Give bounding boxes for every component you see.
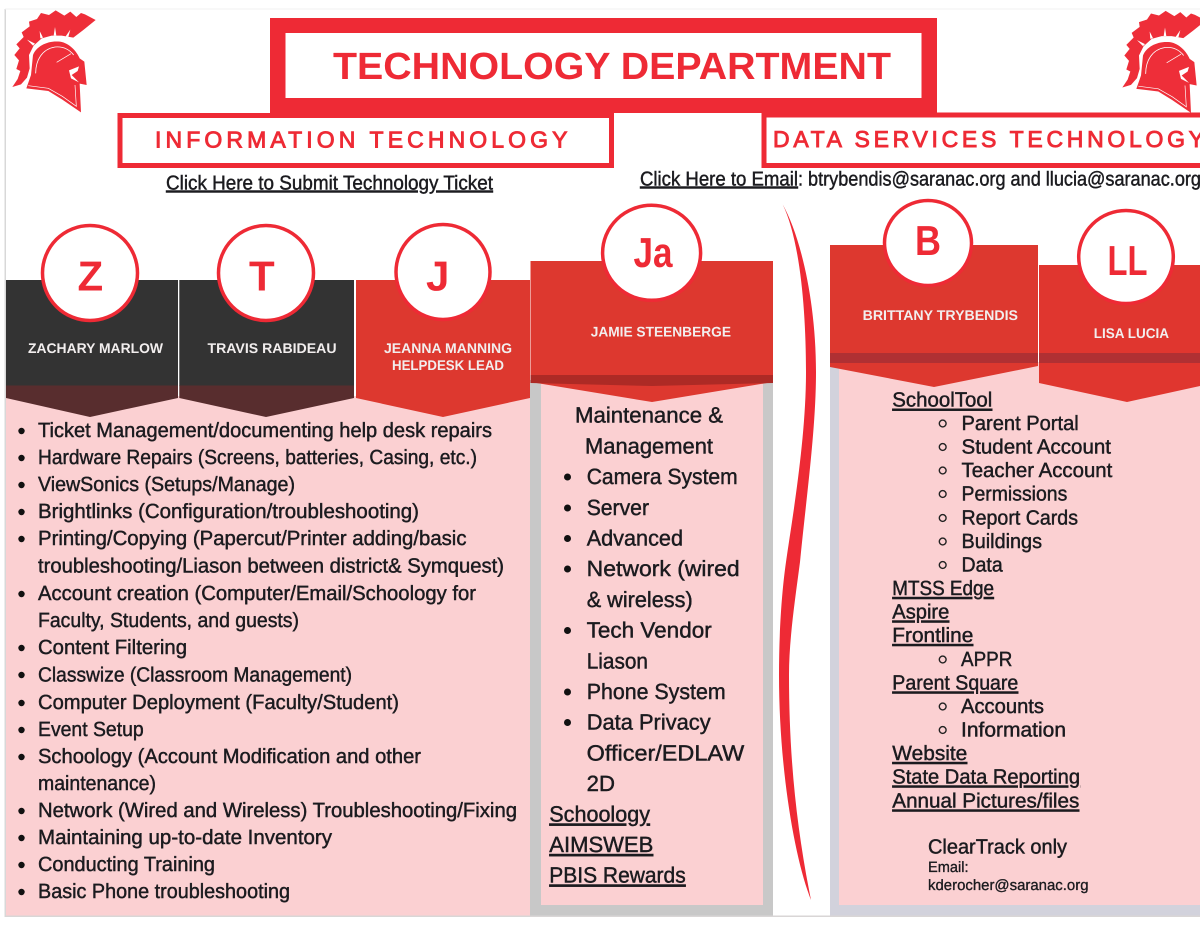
ribbon: Jeanna Manning: JEANNA MANNING — [384, 340, 512, 356]
note: ClearTrack contact: kderocher@saranac.org — [928, 877, 1088, 894]
list: data services duties — [892, 389, 1113, 812]
note: ClearTrack contact: ClearTrack only — [928, 836, 1068, 858]
ribbon: Zachary Marlow: ZACHARY MARLOW — [28, 340, 164, 356]
list: information technology duties: Network (Wired and Wireless) Troubleshooting/Fixing — [38, 799, 517, 822]
list: data services duties: MTSS Edge — [892, 577, 994, 600]
list: information technology duties: Event Setup — [38, 718, 144, 741]
ribbon: Jamie Steenberge: JAMIE STEENBERGE — [591, 324, 731, 340]
list: Jamie duties: Maintenance & — [575, 402, 723, 428]
divider swoosh — [779, 204, 816, 900]
list: information technology duties: Classwize (Classroom Management) — [38, 664, 352, 686]
list: information technology duties: Account creation (Computer/Email/Schoology for — [38, 582, 476, 605]
ribbon: Jamie Steenberge — [530, 205, 773, 402]
list: data services duties: Parent Portal — [962, 412, 1079, 435]
link: submit technology ticket: Click Here to Submit Technology Ticket — [166, 172, 493, 194]
list: Jamie duties: Liason — [587, 648, 648, 674]
ribbon: Travis Rabideau: TRAVIS RABIDEAU — [208, 340, 336, 356]
list: data services duties: Accounts — [961, 695, 1044, 718]
list: data services duties: Report Cards — [962, 506, 1078, 530]
list: Jamie duties: Data Privacy — [587, 710, 711, 734]
list: data services duties: Website — [892, 742, 967, 765]
link: email contacts: Click Here to Email — [640, 168, 798, 190]
list: data services duties: Aspire — [892, 600, 949, 624]
list: Jamie duties: AIMSWEB — [549, 832, 653, 857]
list: Jamie duties: Advanced — [587, 526, 683, 550]
list: Jamie duties: Server — [587, 495, 649, 520]
ribbon: Jeanna Manning — [356, 224, 530, 417]
ribbon: Zachary Marlow — [6, 226, 178, 417]
heading: information technology — [120, 116, 612, 166]
note: ClearTrack contact — [928, 836, 1088, 894]
title banner — [270, 18, 937, 113]
list: data services duties: Buildings — [962, 530, 1042, 553]
list: information technology duties: Schoology (Account Modification and other — [38, 745, 421, 768]
ribbon: Brittany Trybendis — [830, 200, 1038, 387]
list: data services duties: Permissions — [962, 482, 1067, 506]
list: Jamie duties: Tech Vendor — [587, 618, 712, 642]
list: data services duties: Student Account — [962, 436, 1111, 458]
note: ClearTrack contact: Email: — [928, 859, 968, 876]
list: Jamie duties: Phone System — [587, 679, 726, 704]
panel: data services list background — [830, 362, 1200, 916]
list: Jamie duties — [549, 402, 745, 888]
list: data services duties: Frontline — [892, 624, 973, 647]
list: information technology duties: Basic Phone troubleshooting — [38, 880, 290, 903]
list: Jamie duties: Officer/EDLAW — [587, 740, 745, 766]
list: information technology duties: troubleshooting/Liason between district& Symquest) — [38, 554, 504, 578]
heading: data services technology: DATA SERVICES TECHNOLOGY — [773, 126, 1200, 152]
list: Jamie duties: & wireless) — [587, 587, 693, 612]
icon: spartan helmet left — [12, 10, 96, 112]
list: information technology duties: Ticket Management/documenting help desk repairs — [38, 419, 492, 442]
ribbon: Travis Rabideau: T — [249, 252, 275, 300]
list: information technology duties: Brightlinks (Configuration/troubleshooting) — [38, 500, 419, 523]
title text: TECHNOLOGY DEPARTMENT — [333, 46, 891, 88]
list: data services duties: State Data Reporting — [892, 766, 1080, 788]
list: information technology duties: Faculty, Students, and guests) — [38, 609, 299, 632]
list: data services duties: SchoolTool — [892, 389, 992, 412]
list: Jamie duties: Camera System — [587, 464, 738, 489]
list: information technology duties: ViewSonics (Setups/Manage) — [38, 473, 295, 496]
ribbon: Lisa Lucia: LL — [1108, 237, 1148, 284]
list: information technology duties: Conducting Training — [38, 853, 215, 876]
list: Jamie duties: Schoology — [549, 802, 650, 826]
list: data services duties: Annual Pictures/files — [892, 790, 1079, 812]
ribbon: Brittany Trybendis: BRITTANY TRYBENDIS — [863, 307, 1018, 323]
list: data services duties: Teacher Account — [962, 459, 1113, 482]
list: information technology duties: Hardware Repairs (Screens, batteries, Casing, etc.) — [38, 446, 477, 469]
ribbon: Lisa Lucia: LISA LUCIA — [1094, 325, 1169, 341]
ribbon: Travis Rabideau — [179, 226, 354, 417]
ribbon: Jeanna Manning: J — [426, 252, 449, 300]
list: data services duties: Information — [961, 718, 1066, 742]
icon: spartan helmet right — [1122, 11, 1200, 113]
heading: information technology: INFORMATION TECHNOLOGY — [155, 126, 568, 152]
list: information technology duties: Computer Deployment (Faculty/Student) — [38, 691, 399, 714]
list: data services duties: APPR — [961, 648, 1012, 671]
ribbon: Brittany Trybendis: B — [915, 217, 941, 264]
list: data services duties: Parent Square — [892, 672, 1018, 694]
panel: information technology list background — [6, 396, 530, 916]
ribbon: Jeanna Manning: HELPDESK LEAD — [392, 357, 504, 373]
list: Jamie duties: Network (wired — [587, 556, 740, 581]
list: information technology duties: Printing/Copying (Papercut/Printer adding/basic — [38, 527, 466, 550]
ribbon: Jamie Steenberge: Ja — [634, 229, 673, 276]
list: data services duties: Data — [962, 554, 1003, 576]
list: information technology duties: Maintaining up-to-date Inventory — [38, 826, 333, 849]
list: information technology duties: Content Filtering — [38, 636, 187, 659]
ribbon: Zachary Marlow: Z — [78, 252, 103, 300]
list: Jamie duties: Management — [585, 434, 713, 458]
panel: Jamie list background — [530, 380, 773, 916]
list: information technology duties — [18, 419, 517, 903]
ribbon: Lisa Lucia — [1039, 210, 1200, 402]
list: Jamie duties: 2D — [587, 771, 615, 796]
heading: data services technology — [764, 115, 1200, 166]
list: information technology duties: maintenance) — [38, 772, 156, 795]
list: Jamie duties: PBIS Rewards — [549, 862, 686, 888]
